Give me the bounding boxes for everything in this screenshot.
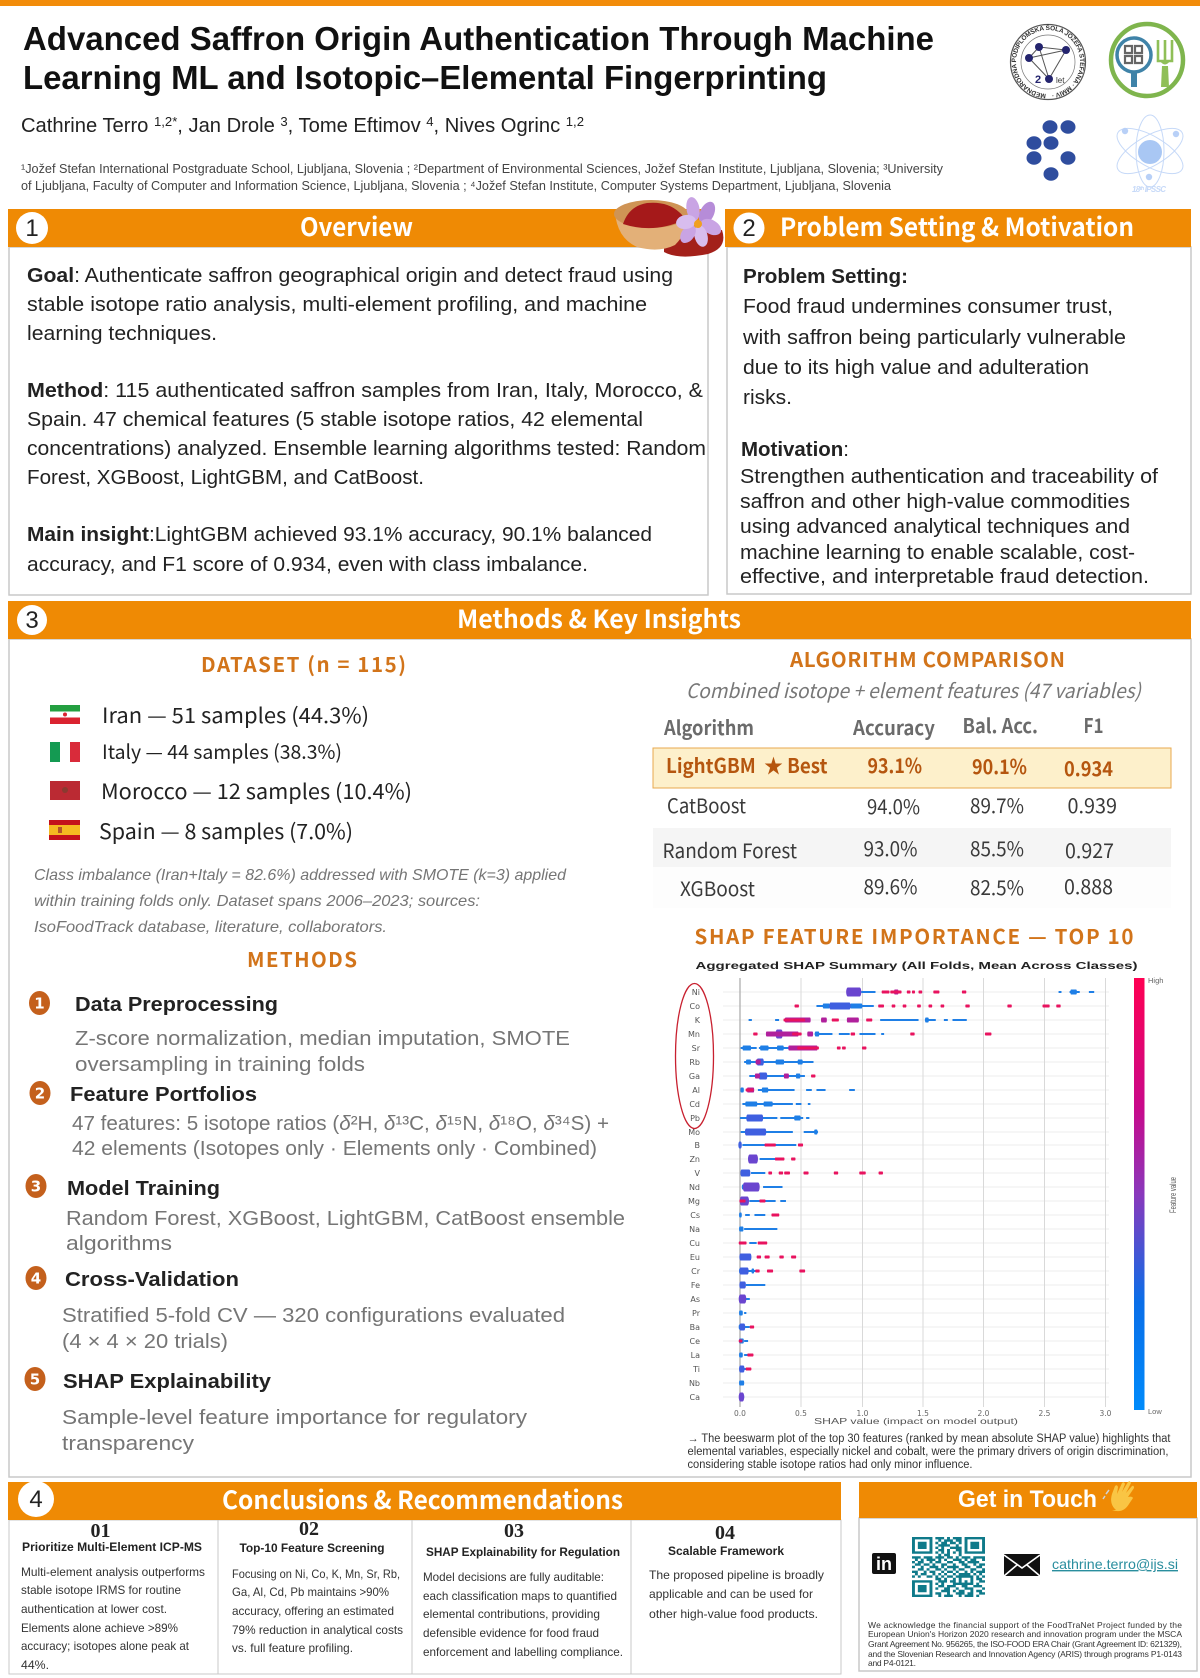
recommendation 03: Model decisions are fully auditable: (423, 1570, 604, 1584)
problem setting text: Problem Setting: (743, 265, 908, 288)
method step 2: 2 (35, 1084, 45, 1102)
table: algorithm comparison: 89.7% (970, 790, 1024, 819)
recommendation 01: 01 (90, 1520, 110, 1542)
icon: LinkedIn: in (876, 1554, 892, 1574)
method step 1: Data Preprocessing (75, 993, 278, 1016)
table: algorithm comparison: 94.0% (867, 791, 920, 820)
overview: method: Spain. 47 chemical features (5 stable isotope ratios, 42 elemental (27, 408, 643, 431)
flag: Spain (49, 820, 80, 840)
chart title: Aggregated SHAP Summary (All Folds, Mean Across Classes) (696, 960, 1138, 972)
top accent bar (0, 0, 1200, 6)
feature labels: As (690, 1295, 700, 1304)
methods number badge: 3 (25, 607, 39, 634)
overview: goal: stable isotope ratio analysis, multi-element profiling, and machine (27, 293, 647, 316)
acknowledgement: and P4-0121. (868, 1658, 916, 1668)
acknowledgement: European Union's Horizon 2020 research and innovation program under the MSCA (868, 1629, 1182, 1639)
recommendation 01: Prioritize Multi-Element ICP-MS (22, 1540, 202, 1554)
method step 1 (29, 991, 570, 1076)
heading: methods: METHODS (247, 943, 357, 973)
title (23, 20, 934, 96)
table: algorithm comparison: Algorithm (663, 712, 754, 741)
feature labels: Mn (688, 1030, 700, 1039)
method step 2: 42 elements (Isotopes only · Elements only · Combined) (72, 1137, 597, 1160)
logo: blue dots (1026, 120, 1076, 181)
method step 3: Random Forest, XGBoost, LightGBM, CatBoost ensemble (66, 1207, 625, 1230)
recommendation 03: enforcement and labelling compliance. (423, 1645, 623, 1659)
problem setting text: due to its high value and adulteration (743, 356, 1089, 379)
feature labels: La (691, 1351, 700, 1360)
method step 1: 1 (34, 994, 45, 1012)
icon: envelope (1004, 1554, 1040, 1576)
method step 2: Feature Portfolios (70, 1083, 257, 1106)
conclusions header bar (8, 1482, 841, 1520)
feature labels: Nb (689, 1379, 700, 1388)
table row: LightGBM best (653, 748, 1171, 788)
overview heading: Overview (300, 208, 413, 244)
method step 5: transparency (62, 1432, 195, 1455)
problem setting text: risks. (743, 386, 792, 409)
recommendation 01 (21, 1520, 205, 1672)
recommendation 01: stable isotope IRMS for routine (21, 1583, 181, 1597)
x axis: 2.5 (1039, 1409, 1051, 1418)
recommendation 04 (649, 1522, 824, 1621)
recommendation 03: SHAP Explainability for Regulation (426, 1545, 620, 1559)
problem setting text (742, 265, 1126, 409)
motivation text: using advanced analytical techniques and (740, 515, 1130, 538)
heading: algorithm comparison: ALGORITHM COMPARISON (789, 643, 1065, 673)
dataset note (34, 867, 567, 936)
SHAP caption: → The beeswarm plot of the top 30 features (ranked by mean absolute SHAP value) highlights that (688, 1433, 1171, 1445)
table row: LightGBM best: 90.1% (972, 751, 1027, 780)
dataset note: IsoFoodTrack database, literature, collaborators. (34, 919, 387, 936)
overview number badge: 1 (25, 215, 39, 242)
acknowledgement: We acknowledge the financial support of the FoodTraNet Project funded by the (868, 1620, 1182, 1630)
feature labels: Ni (692, 988, 700, 997)
x axis: SHAP value (impact on model output) (814, 1417, 1019, 1426)
feature labels: Ca (690, 1393, 700, 1402)
chart: SHAP beeswarm summary (676, 960, 1178, 1426)
feature labels (688, 988, 701, 1402)
feature labels: Pr (692, 1309, 701, 1318)
feature labels: Ba (690, 1323, 700, 1332)
motivation text: machine learning to enable scalable, cost- (740, 541, 1135, 564)
table: algorithm comparison (653, 710, 1171, 908)
recommendation 03: elemental contributions, providing (423, 1607, 600, 1621)
dataset note: Class imbalance (Iran+Italy = 82.6%) addressed with SMOTE (k=3) applied (34, 867, 567, 884)
panel: get in touch (859, 1481, 1197, 1671)
logo: atom globe (1110, 115, 1190, 194)
recommendation 03: 03 (504, 1520, 524, 1542)
SHAP caption: elemental variables, especially nickel and cobalt, were the primary drivers of origin discrimination, (688, 1446, 1168, 1458)
recommendation 02: Top-10 Feature Screening (240, 1541, 384, 1555)
feature labels: Ce (689, 1337, 700, 1346)
feature labels: Sr (692, 1044, 701, 1053)
Morocco samples: Morocco — 12 samples (10.4%) (101, 776, 412, 806)
method step 4: 4 (31, 1270, 41, 1288)
authors: , Tome Eftimov (288, 115, 426, 137)
conclusions heading: Conclusions & Recommendations (222, 1481, 623, 1517)
recommendation 04: Scalable Framework (668, 1544, 784, 1558)
method step 1: Z-score normalization, median imputation, SMOTE (75, 1027, 570, 1050)
flag: Iran (50, 705, 80, 724)
problem number badge: 2 (742, 215, 756, 242)
problem number badge (734, 212, 764, 244)
feature labels: Co (690, 1002, 700, 1011)
table row: LightGBM best: 93.1% (868, 750, 922, 779)
table: algorithm comparison: 89.6% (864, 871, 918, 900)
acknowledgement: and the Slovenian Research and Innovation Agency (ARIS) through programs P1-0143 (868, 1649, 1182, 1659)
table: algorithm comparison: XGBoost (680, 873, 755, 902)
authors: 1,2 (566, 114, 584, 129)
panel: conclusions and recommendations (8, 1481, 841, 1674)
method step 5 (24, 1367, 528, 1455)
colour bar: High (1148, 976, 1163, 985)
icon: waving hand (1103, 1481, 1134, 1511)
conclusions number badge: 4 (29, 1486, 43, 1513)
SHAP caption: considering stable isotope ratios had only minor influence. (688, 1459, 972, 1471)
contact heading: Get in Touch (958, 1486, 1097, 1513)
recommendation 01: 44%. (21, 1658, 49, 1672)
email address: cathrine.terro@ijs.si (1052, 1556, 1178, 1572)
authors: 4 (426, 114, 434, 129)
table row: LightGBM best: 0.934 (1064, 753, 1113, 782)
methods number badge (17, 605, 47, 635)
colour bar: Low (1148, 1407, 1162, 1416)
table: algorithm comparison: 85.5% (970, 833, 1024, 862)
recommendation 02 (232, 1518, 403, 1655)
logo: IPS circular seal: 2 (1035, 74, 1041, 86)
overview: method: Forest, XGBoost, LightGBM, and CatBoost. (27, 466, 424, 489)
problem heading: Problem Setting & Motivation (780, 208, 1134, 244)
recommendation 03: defensible evidence for food fraud (423, 1626, 599, 1640)
contact header bar (859, 1482, 1197, 1518)
heading: dataset: DATASET (n = 115) (201, 648, 406, 678)
logo: IPS circular seal: MEDNARODNA PODIPLOMSKA ŠOLA JOŽEFA STEFANA · MMIV · (1012, 24, 1085, 98)
method step 4: (4 × 4 × 20 trials) (62, 1330, 228, 1353)
method step 2 (30, 1081, 609, 1160)
feature labels: Na (689, 1225, 700, 1234)
table: algorithm comparison: 82.5% (970, 872, 1024, 901)
recommendation 04: other high-value food products. (649, 1607, 818, 1621)
method step 5: SHAP Explainability (63, 1370, 272, 1393)
recommendation 02: 02 (299, 1518, 319, 1540)
motivation text (740, 438, 1158, 588)
logo: IPS circular seal: let (1056, 76, 1065, 85)
panel: overview (8, 208, 708, 595)
overview: goal: learning techniques. (27, 322, 217, 345)
table: algorithm comparison: Bal. Acc. (962, 710, 1038, 739)
method step 3 (26, 1174, 625, 1255)
feature labels: Cs (690, 1211, 700, 1220)
affiliations (21, 162, 944, 193)
dataset note: within training folds only. Dataset spans 2006–2023; sources: (34, 893, 480, 910)
methods heading: Methods & Key Insights (457, 600, 741, 636)
Italy samples: Italy — 44 samples (38.3%) (102, 736, 342, 765)
table: algorithm comparison: 0.927 (1065, 835, 1114, 864)
acknowledgement: Grant Agreement No. 956265, the ISO-FOOD ERA Chair (Grant Agreement ID: 621329), (868, 1639, 1182, 1649)
method step 3: Model Training (67, 1177, 220, 1200)
overview number badge (16, 212, 48, 244)
Spain samples: Spain — 8 samples (7.0%) (99, 816, 353, 846)
acknowledgement (868, 1620, 1182, 1668)
feature labels: Nd (689, 1183, 700, 1192)
authors: , Nives Ogrinc (434, 115, 566, 137)
feature labels: Ti (692, 1365, 700, 1374)
logo: food QR fork (1111, 24, 1183, 96)
table: algorithm comparison: F1 (1084, 710, 1104, 739)
authors: 1,2* (154, 114, 177, 129)
overview: method: Method: 115 authenticated saffron samples from Iran, Italy, Morocco, & (27, 379, 703, 402)
x axis: 0.5 (795, 1409, 807, 1418)
method step 3: 3 (31, 1178, 41, 1196)
feature labels: Mg (688, 1197, 700, 1206)
overview: goal (27, 264, 673, 345)
feature labels: Pb (690, 1114, 700, 1123)
affiliations: of Ljubljana, Faculty of Computer and Information Science, Ljubljana, Slovenia ; ⁴Jožef Stefan Institute, Computer Systems Department, Ljubljana, Slovenia (21, 179, 891, 193)
authors: 3 (280, 114, 288, 129)
recommendation 02: Ga, Al, Cd, Pb maintains >90% (232, 1585, 389, 1599)
motivation text: Motivation: (741, 438, 849, 461)
affiliations: ¹Jožef Stefan International Postgraduate School, Ljubljana, Slovenia ; ²Department of Environmental Sciences, Jožef Stefan Institute, Ljubljana, Slovenia; ³University (21, 162, 944, 176)
recommendation 02: Focusing on Ni, Co, K, Mn, Sr, Rb, (232, 1567, 400, 1581)
method step 4: Cross-Validation (65, 1268, 239, 1291)
recommendation 01: Elements alone achieve >89% (21, 1621, 178, 1635)
method step 3: algorithms (66, 1232, 172, 1255)
feature labels: Ga (689, 1072, 700, 1081)
recommendation 02: accuracy, offering an estimated (232, 1604, 394, 1618)
colour bar (1134, 976, 1178, 1416)
feature labels: Fe (691, 1281, 700, 1290)
problem header bar (725, 209, 1191, 247)
recommendation 02: vs. full feature profiling. (232, 1641, 353, 1655)
table: algorithm comparison: 93.0% (864, 833, 918, 862)
overview: main insight (27, 523, 652, 576)
feature labels: Mo (688, 1128, 700, 1137)
method step 1: oversampling in training folds (75, 1053, 365, 1076)
table: algorithm comparison: Random Forest (662, 835, 797, 864)
highlight ellipse: top 10 features (676, 984, 714, 1128)
x axis: 3.0 (1100, 1409, 1112, 1418)
overview header bar (8, 209, 708, 247)
recommendation 01: Multi-element analysis outperforms (21, 1565, 205, 1579)
authors: , Jan Drole (177, 115, 280, 137)
motivation text: saffron and other high-value commodities (740, 490, 1130, 513)
method step 5: Sample-level feature importance for regulatory (62, 1406, 528, 1429)
x axis (734, 1409, 1112, 1426)
beeswarm points (739, 992, 1094, 1397)
table: algorithm comparison: Accuracy (852, 712, 935, 741)
recommendation 04: 04 (715, 1522, 735, 1544)
table row: LightGBM best: LightGBM ★ Best (666, 750, 828, 779)
feature labels: Cu (689, 1239, 700, 1248)
motivation text: effective, and interpretable fraud detection. (740, 565, 1149, 588)
feature labels: K (695, 1016, 701, 1025)
x axis: 1.0 (857, 1409, 869, 1418)
SHAP caption (688, 1433, 1171, 1471)
x axis: 2.0 (978, 1409, 990, 1418)
feature labels: V (695, 1169, 701, 1178)
colour bar: Feature value (1168, 1177, 1178, 1213)
x axis: 1.5 (917, 1409, 929, 1418)
panel: problem setting and motivation (725, 208, 1191, 594)
panel: methods and key insights (8, 600, 1191, 1477)
icon: LinkedIn (872, 1553, 896, 1574)
flag: Morocco (50, 781, 80, 800)
feature labels: Rb (689, 1058, 700, 1067)
methods header bar (8, 601, 1191, 639)
problem setting text: Food fraud undermines consumer trust, (743, 295, 1113, 318)
recommendation 04: applicable and can be used for (649, 1587, 813, 1601)
table: algorithm comparison: 0.939 (1068, 790, 1117, 819)
overview: main insight: Main insight:LightGBM achieved 93.1% accuracy, 90.1% balanced (27, 523, 652, 546)
motivation text: Strengthen authentication and traceability of (740, 465, 1158, 488)
overview: method (27, 379, 706, 489)
conclusions number badge (18, 1481, 54, 1517)
overview: goal: Goal: Authenticate saffron geographical origin and detect fraud using (27, 264, 673, 287)
recommendation 02: 79% reduction in analytical costs (232, 1623, 403, 1637)
table: algorithm comparison: 0.888 (1064, 871, 1113, 900)
overview: method: concentrations) analyzed. Ensemble learning algorithms tested: Random (27, 437, 706, 460)
feature labels: Al (692, 1086, 700, 1095)
method step 2: 47 features: 5 isotope ratios (δ²H, δ¹³C, δ¹⁵N, δ¹⁸O, δ³⁴S) + (72, 1112, 609, 1135)
heading: SHAP feature importance: SHAP FEATURE IMPORTANCE — TOP 10 (694, 920, 1134, 950)
feature labels: Zn (689, 1155, 700, 1164)
feature labels: Cr (691, 1267, 701, 1276)
recommendation 03: each classification maps to quantified (423, 1589, 617, 1603)
recommendation 04: The proposed pipeline is broadly (649, 1568, 824, 1582)
method step 4 (26, 1266, 565, 1353)
icon: saffron bowl and crocus (614, 196, 724, 257)
recommendation 01: accuracy; isotopes alone peak at (21, 1639, 190, 1653)
QR code (912, 1537, 985, 1597)
problem setting text: with saffron being particularly vulnerable (742, 326, 1126, 349)
recommendation 01: authentication at lower cost. (21, 1602, 167, 1616)
subtitle: combined features: Combined isotope + element features (47 variables) (686, 675, 1142, 704)
title: Advanced Saffron Origin Authentication Through Machine (23, 20, 934, 57)
title: Learning ML and Isotopic–Elemental Fingerprinting (23, 59, 827, 96)
feature labels: B (694, 1141, 700, 1150)
flag: Italy (50, 742, 80, 762)
logo: atom globe: 18ᵗʰ IPSSC (1132, 185, 1166, 194)
method step 5: 5 (30, 1370, 40, 1388)
authors: Cathrine Terro (21, 115, 147, 137)
overview: main insight: accuracy, and F1 score of 0.934, even with class imbalance. (27, 553, 588, 576)
method step 4: Stratified 5-fold CV — 320 configurations evaluated (62, 1304, 565, 1327)
Iran samples: Iran — 51 samples (44.3%) (102, 700, 369, 730)
feature labels: Eu (690, 1253, 700, 1262)
x axis: 0.0 (734, 1409, 746, 1418)
recommendation 03 (423, 1520, 623, 1659)
feature labels: Cd (689, 1100, 700, 1109)
table: algorithm comparison: CatBoost (667, 790, 746, 819)
